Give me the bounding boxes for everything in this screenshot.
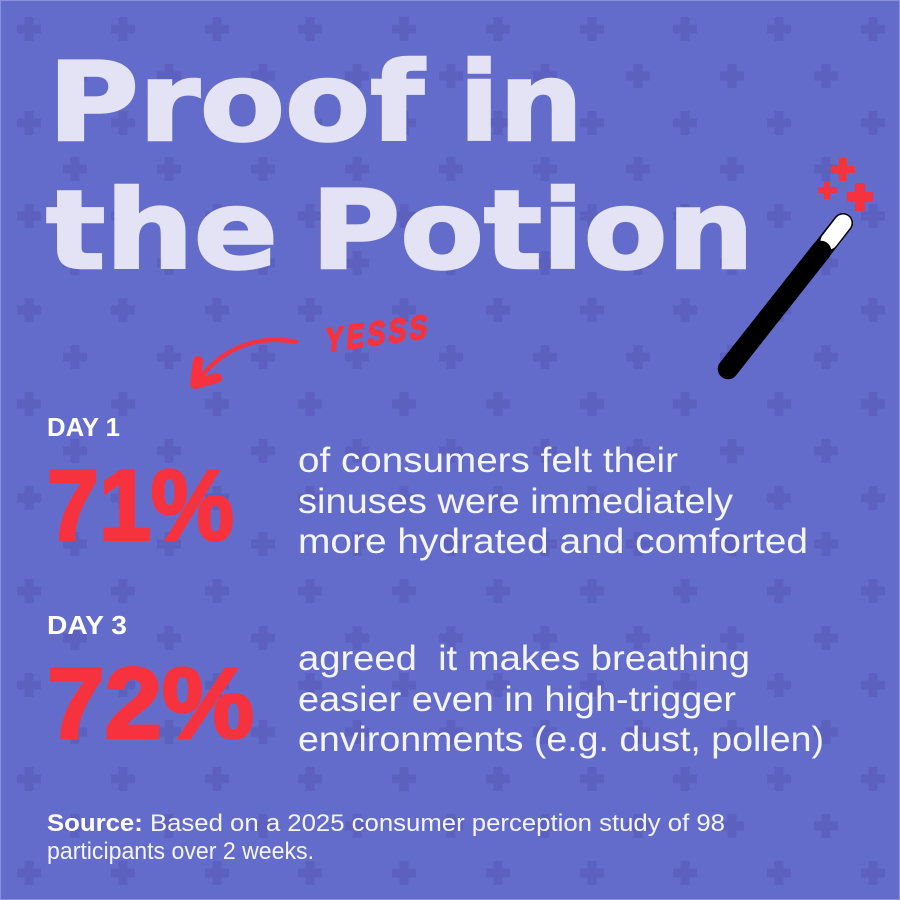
- day 1 label: DAY 1: [47, 412, 120, 442]
- wand black body: [728, 251, 821, 369]
- source note: participants over 2 weeks.: [47, 838, 314, 865]
- stat: day 3: [47, 610, 824, 760]
- day 3 label: DAY 3: [47, 610, 127, 640]
- day 1 description: more hydrated and comforted: [298, 522, 808, 561]
- sparkle left: [818, 181, 837, 199]
- day 1 description: sinuses were immediately: [298, 482, 734, 521]
- day 3 description: environments (e.g. dust, pollen): [298, 720, 824, 759]
- wand white tip: [829, 223, 843, 241]
- title: [46, 39, 754, 294]
- day 3 description: easier even in high-trigger: [298, 680, 736, 719]
- wand outline: [728, 223, 843, 369]
- title: Potion: [311, 167, 754, 294]
- sparkle top: [831, 158, 855, 181]
- handwritten note: YESSS: [324, 309, 428, 360]
- source note: [47, 810, 725, 865]
- day 1 percentage: 71%: [47, 450, 234, 562]
- day 1 description: of consumers felt their: [298, 441, 678, 480]
- arrow pointing to day 1: [195, 340, 296, 384]
- day 3 description: [298, 639, 824, 759]
- day 1 description: [298, 441, 808, 561]
- stat: day 1: [47, 412, 808, 562]
- icon: magic wand with sparkles: [728, 158, 873, 369]
- sparkle right: [847, 183, 873, 211]
- source note: Source: Based on a 2025 consumer perception study of 98: [47, 810, 725, 837]
- title: the: [46, 167, 278, 294]
- title: Proof: [48, 39, 426, 166]
- day 3 description: agreed it makes breathing: [298, 639, 750, 678]
- title: in: [459, 39, 583, 166]
- day 3 percentage: 72%: [47, 648, 254, 760]
